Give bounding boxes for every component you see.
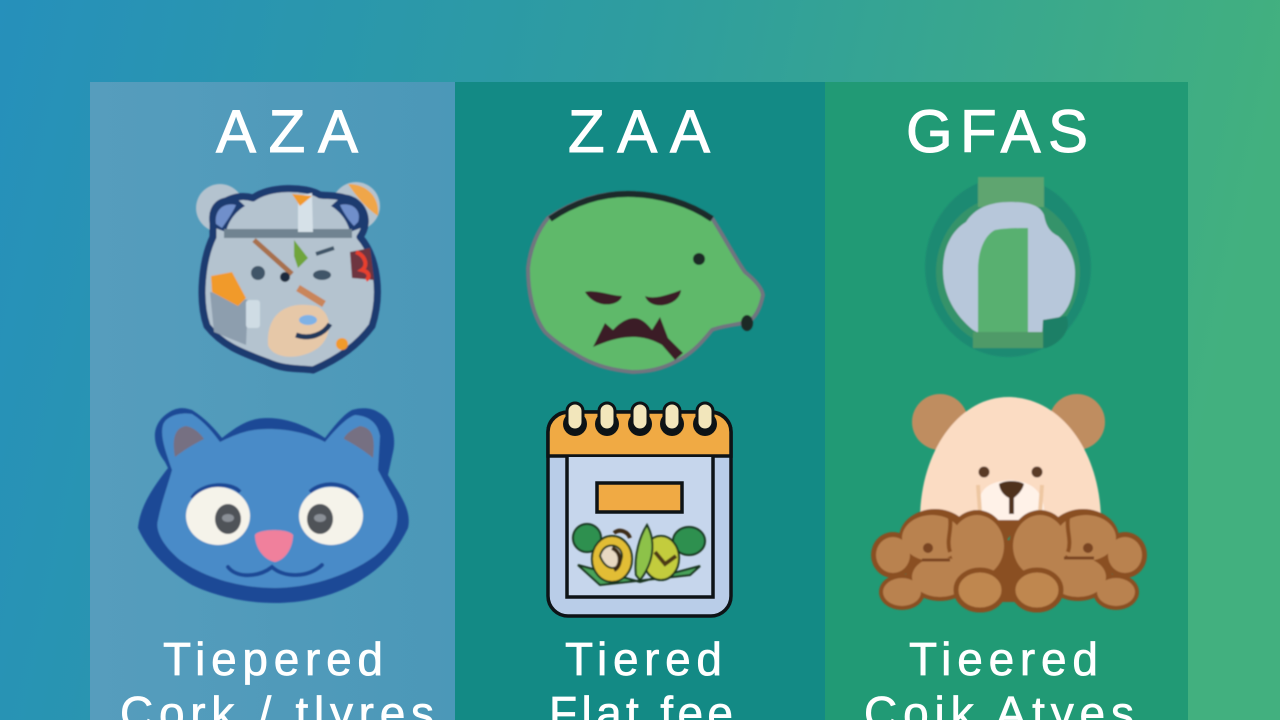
brown paws: [871, 509, 1147, 610]
icon: blue cat: [138, 408, 409, 603]
label: Tieered: Tieered: [909, 633, 1098, 685]
label: Tiered: Tiered: [565, 633, 722, 685]
paw outlines merged: [871, 509, 1147, 610]
icon: calendar with vegetables: [548, 403, 731, 616]
label: Tiepered: Tiepered: [163, 633, 383, 685]
heading: GFAS: GFAS: [906, 98, 1088, 165]
icon: green monster: [528, 193, 763, 372]
heading: ZAA: ZAA: [568, 98, 710, 165]
calendar vegetables: [573, 524, 705, 585]
icon: patchwork grey bear: [196, 182, 380, 370]
heading: AZA: AZA: [216, 98, 358, 165]
panel: ZAA column: [455, 82, 825, 720]
icon: green and grey round badge: [925, 177, 1091, 357]
icon: bear with brown paws: [871, 394, 1147, 610]
paw fills: [876, 515, 1142, 606]
panel: GFAS column: [825, 82, 1188, 720]
calendar rings: [563, 403, 717, 436]
panel: AZA column: [90, 82, 455, 720]
